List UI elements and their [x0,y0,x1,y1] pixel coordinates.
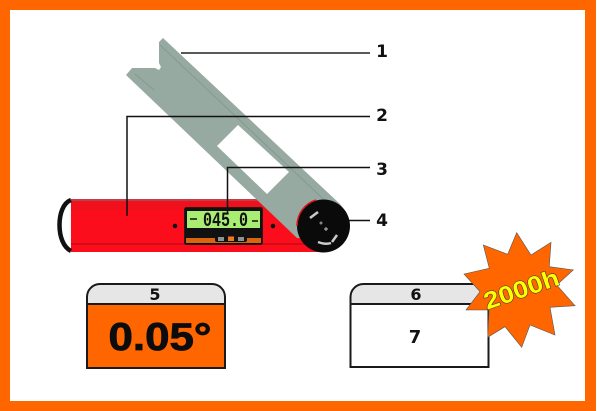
display buttons [215,236,247,242]
star shape [464,233,575,347]
label 1: 1 [376,42,388,62]
blade grooves [135,45,335,210]
box 5 value: 0.05° [108,316,212,359]
box 7 number: 7 [409,327,421,348]
knob [297,200,350,252]
illustration: digital angle gauge [60,38,350,252]
box 7 body [350,304,488,367]
box 5 header [87,284,225,304]
starburst badge [464,233,575,347]
box 5 header number: 5 [149,285,161,304]
LCD screen [187,211,260,228]
leader line 3 [228,168,370,214]
LCD reading: 045.0 [203,210,248,233]
label 3: 3 [376,160,388,180]
icon: end handle [60,200,71,251]
box 5 body [87,304,225,368]
red body of gauge [71,199,324,252]
LCD arrows [190,219,258,221]
box 6 number: 6 [410,285,422,304]
leader line 2 [127,116,370,216]
leader line 4 [349,220,370,222]
steel blade [126,38,346,240]
box 6 header [350,284,488,304]
panel: box 6 and 7 [350,284,488,367]
label 4: 4 [376,211,388,231]
display unit [184,208,262,244]
panel: box 5 [87,284,225,368]
screw dots [173,224,275,228]
label 2: 2 [376,106,388,126]
orange strip [186,238,261,243]
leader line 1 [181,52,370,54]
badge text: 2000h [480,264,563,315]
